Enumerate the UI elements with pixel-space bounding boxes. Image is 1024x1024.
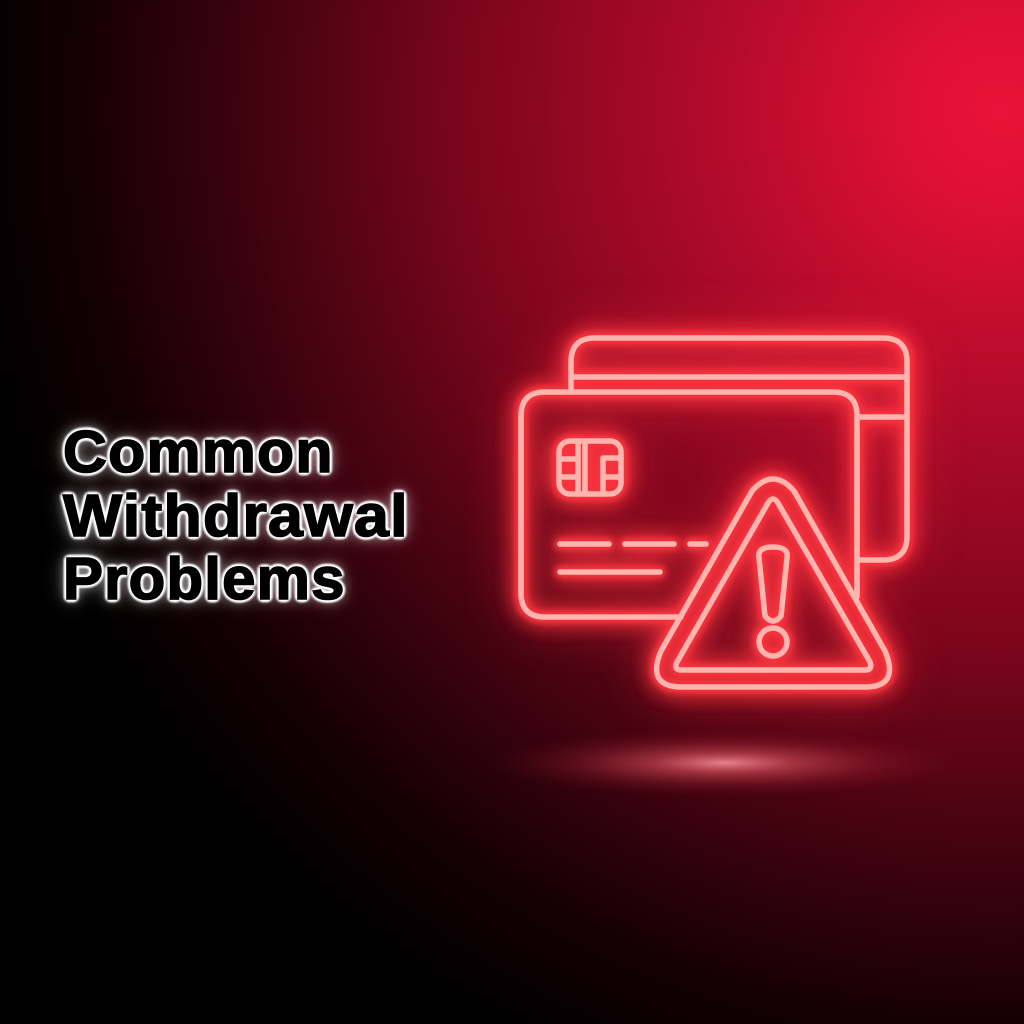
title — [52, 418, 417, 612]
icon: exclamation mark — [759, 547, 787, 656]
title: Problems — [63, 546, 346, 612]
title: Withdrawal — [63, 482, 409, 548]
icon: card chip — [559, 441, 621, 494]
icon: back card — [571, 338, 907, 560]
title: Common — [63, 419, 334, 485]
neon line core — [521, 338, 907, 687]
icon: card number lines — [560, 544, 706, 572]
icon: front card — [521, 392, 857, 617]
icon: warning triangle — [657, 479, 890, 687]
